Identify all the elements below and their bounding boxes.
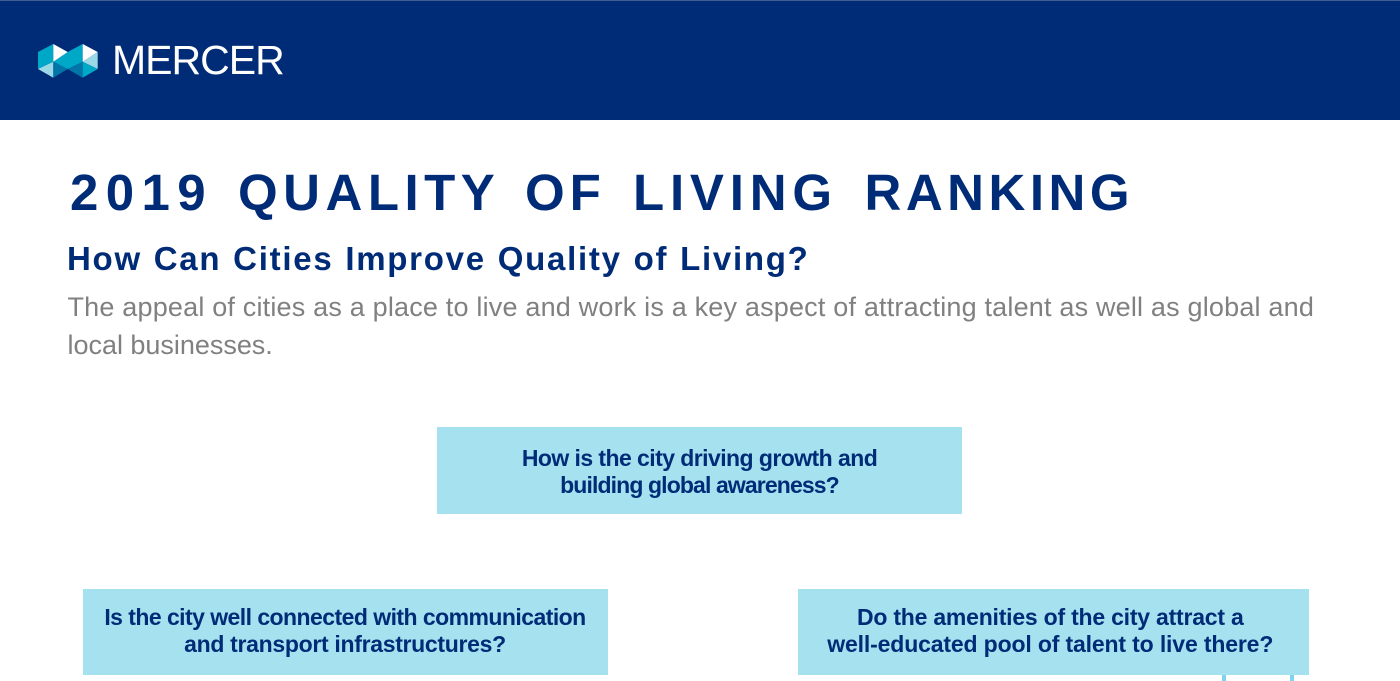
title: OF bbox=[525, 164, 606, 220]
connector stub left bbox=[1222, 675, 1226, 681]
intro text: The appeal of cities as a place to live and work is a key aspect of attracting talent as well as global and bbox=[68, 292, 1314, 322]
connector stub right bbox=[1290, 675, 1294, 681]
icon: Mercer logo bbox=[38, 44, 98, 78]
question box: amenities: Do the amenities of the city attract a bbox=[857, 604, 1244, 630]
logo wordmark: MERCER bbox=[112, 37, 284, 83]
question box: growth and awareness: building global awareness? bbox=[560, 472, 839, 498]
question box: connectivity bbox=[82, 588, 608, 675]
question box: amenities bbox=[798, 588, 1309, 675]
title: RANKING bbox=[864, 164, 1134, 220]
intro text: local businesses. bbox=[68, 330, 273, 360]
question box: growth and awareness: How is the city driving growth and bbox=[522, 445, 877, 471]
question box: connectivity: Is the city well connected with communication bbox=[104, 604, 586, 630]
intro text bbox=[68, 292, 1314, 360]
header top edge bbox=[0, 0, 1400, 1]
title: QUALITY bbox=[238, 164, 500, 220]
question box: growth and awareness bbox=[437, 427, 962, 514]
question box: amenities: well-educated pool of talent to live there? bbox=[827, 631, 1273, 657]
subtitle: How Can Cities Improve Quality of Living? bbox=[67, 240, 810, 277]
header band bbox=[0, 0, 1400, 120]
title bbox=[70, 164, 1134, 220]
title: LIVING bbox=[633, 164, 838, 220]
question box: connectivity: and transport infrastructures? bbox=[184, 631, 506, 657]
title: 2019 bbox=[70, 164, 213, 220]
